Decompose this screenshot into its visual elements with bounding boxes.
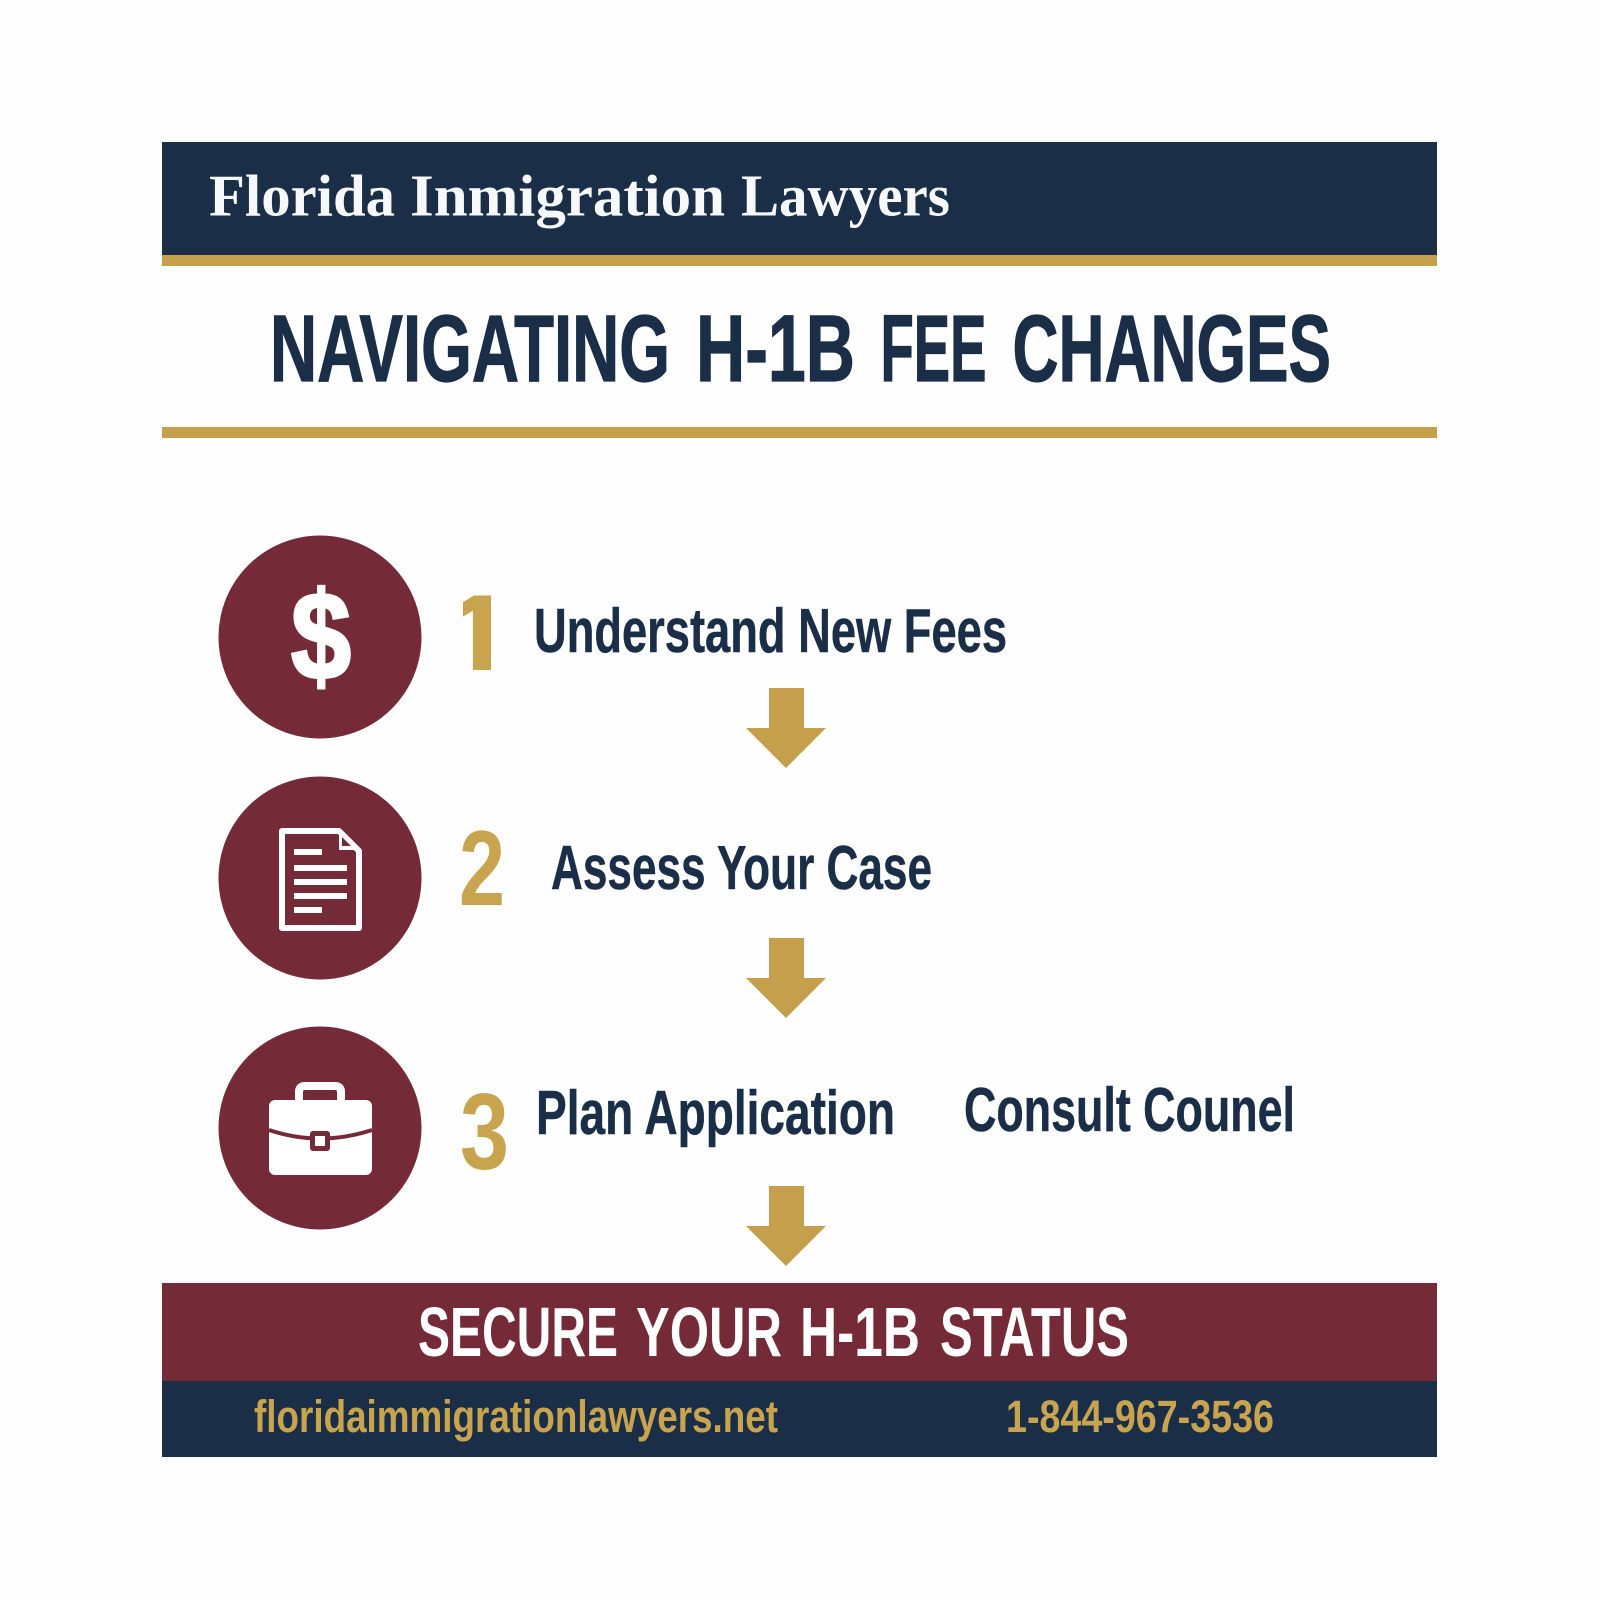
step 3: plan application <box>218 1026 1295 1230</box>
step number 3: 3 <box>460 1071 509 1193</box>
icon: document <box>218 776 422 980</box>
title: FEE <box>880 296 986 402</box>
step label: Assess Your Case: Assess Your Case <box>551 834 932 903</box>
step number 1: 1 <box>441 567 517 713</box>
step 1: understand new fees <box>218 536 1007 738</box>
arrow 3 <box>746 1186 826 1266</box>
call to action text <box>418 1293 1129 1371</box>
icon: dollar sign <box>218 536 422 738</box>
infographic canvas <box>162 142 1437 1457</box>
title <box>162 296 1437 438</box>
title: H-1B <box>696 296 855 402</box>
arrow 2 <box>746 938 826 1018</box>
firm name <box>209 162 950 228</box>
step label: Understand New Fees: Understand New Fees <box>534 597 1007 666</box>
call to action text: STATUS <box>940 1293 1129 1371</box>
icon: briefcase <box>218 1026 422 1230</box>
call to action text: SECURE <box>418 1293 618 1371</box>
firm name: Florida <box>209 162 395 228</box>
step label: Plan Application: Plan Application <box>536 1079 895 1148</box>
contact bar <box>162 1381 1437 1457</box>
step number 2: 2 <box>459 808 505 928</box>
step label: Consult Counel: Consult Counel <box>964 1076 1295 1145</box>
firm name: Lawyers <box>741 162 950 228</box>
firm name: Inmigration <box>410 162 725 228</box>
arrow 1 <box>746 688 826 768</box>
icon: dollar sign: $ <box>291 568 351 706</box>
website: floridaimmigrationlawyers.net <box>254 1391 778 1442</box>
call to action text: H-1B <box>800 1293 920 1371</box>
title: NAVIGATING <box>270 296 670 402</box>
call to action banner <box>162 1283 1437 1381</box>
title: CHANGES <box>1012 296 1331 402</box>
call to action text: YOUR <box>636 1293 782 1371</box>
phone number: 1-844-967-3536 <box>1006 1391 1274 1442</box>
step 2: assess your case <box>218 776 932 980</box>
header banner <box>162 142 1437 266</box>
